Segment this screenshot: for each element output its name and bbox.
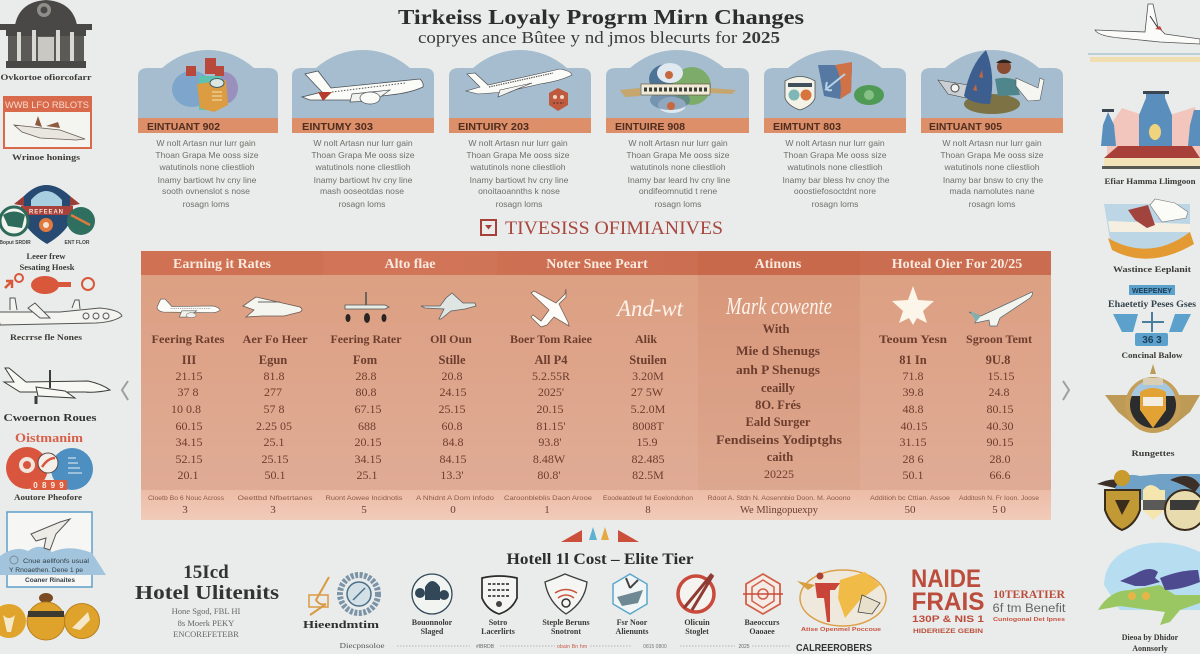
promo sub text: 130P & NIS 1 <box>912 614 985 625</box>
column 4 values: Stille <box>438 353 466 367</box>
card 3 text: Thoan Grapa Me ooss size <box>466 150 570 160</box>
card 3 text: rosagn loms <box>496 199 542 209</box>
footer note 2: obain Bn hm <box>557 644 587 650</box>
label: people: Bouonnolor <box>412 618 453 627</box>
icon: fighter plane <box>421 293 476 319</box>
caption: shield small: Boput SRDIR <box>0 240 31 246</box>
column 6 values: 15.9 <box>636 435 658 449</box>
caption: circles: Aoutore Pheofore <box>14 492 82 502</box>
column 5 values: All P4 <box>535 353 568 367</box>
middle notes column: caith <box>767 450 793 464</box>
card 3 text: W nolt Artasn nur lurr gain <box>468 138 568 148</box>
column 8 values: 66.6 <box>990 468 1010 482</box>
card 4 band <box>606 118 749 133</box>
subtitle: copryes ance Bûtee y nd jmos blecurts for 2025 <box>418 28 780 47</box>
card 5 band <box>764 118 906 133</box>
column 7 values: 48.8 <box>902 402 924 416</box>
footer note 1: #IBRDB <box>476 644 495 650</box>
table header: Noter Snee Peart <box>546 257 648 272</box>
footer numbers: We Mlingopuexpy <box>740 504 818 516</box>
panel: card 1 <box>138 50 278 209</box>
column 5 values: 20.15 <box>536 402 564 416</box>
column 2 values: 277 <box>264 385 282 399</box>
label: squiggle: Hieendmtim <box>303 619 379 631</box>
card 3 text: Inamy bartiowt hv cny line <box>470 175 569 185</box>
footer numbers: 1 <box>544 504 550 516</box>
card 5 text: ooostiefosoctdnt nore <box>794 186 876 196</box>
label: signal shield: Steple Beruns <box>542 618 590 627</box>
footer numbers: 3 <box>270 504 276 516</box>
column 3 values: 28.8 <box>356 369 376 383</box>
caption: blue badge: Concinal Balow <box>1122 350 1183 360</box>
column 6 values: 5.2.0M <box>631 402 666 416</box>
card 4 dome <box>606 50 749 118</box>
panel: card 3 <box>449 50 591 209</box>
card 5 heading: EIMTUNT 803 <box>773 121 841 133</box>
column 4 values: 84.15 <box>440 452 466 466</box>
icon: blue wing badge: WEEPENEY <box>1132 286 1172 295</box>
description: Hone Sgod, FBL HI <box>172 606 240 616</box>
table footer <box>141 490 1051 520</box>
icon: outlined plane <box>0 298 122 325</box>
description: ENCOREFETEBR <box>173 629 239 639</box>
footer captions: Additosh N. Fr Ioon. Joose <box>959 496 1040 502</box>
card 6 text: rosagn loms <box>969 199 1015 209</box>
icon: gold medallions <box>0 593 100 640</box>
caption: wave badge: Wastince Eeplanit <box>1113 264 1191 274</box>
label: red gear: Olicuin <box>684 618 710 627</box>
label: shield grid: Sotro <box>489 618 507 627</box>
column 4 values: 84.8 <box>442 435 464 449</box>
panel: hotel benefits text <box>135 562 279 639</box>
middle notes column: 20225 <box>764 467 794 481</box>
footer captions <box>148 496 1040 502</box>
footer note 3: 0815 0800 <box>643 644 667 650</box>
card 6 text: W nolt Artasn nur lurr gain <box>942 138 1042 148</box>
caption: building: Ovkortoe ofiorcofarr <box>0 72 92 82</box>
column 1 values: 34.15 <box>176 435 202 449</box>
column 8 values: 80.15 <box>986 402 1014 416</box>
benefit: 6f tm Benefit <box>992 603 1066 615</box>
icon: side-view plane <box>4 368 110 404</box>
table header: Atinons <box>755 257 802 272</box>
card 3 text: onoitaoannths k nose <box>478 186 560 196</box>
middle notes column: Mie d Shenugs <box>736 344 820 358</box>
card 1 heading: EINTUANT 902 <box>147 121 220 133</box>
card 1 text: sooth ovnenslot s nose <box>162 186 250 196</box>
middle notes column: Eald Surger <box>746 415 811 429</box>
card 5 text: Inamy bar bless hv cnoy the <box>782 175 890 185</box>
footer right label: CALREEROBERS <box>796 642 872 654</box>
column 5 values: 81.15' <box>536 419 566 433</box>
card 2 text: watutinols none cliestlioh <box>314 162 411 172</box>
column 2 values: Egun <box>259 353 287 367</box>
table header <box>141 251 1051 275</box>
column 5 values: 5.2.55R <box>532 369 570 383</box>
footer numbers: 0 <box>450 504 456 516</box>
footer numbers: 8 <box>645 504 651 516</box>
icon: classical building <box>0 0 92 68</box>
icon: hotel and passport cluster <box>172 58 238 112</box>
column labels: Alik <box>635 332 657 346</box>
icon: blue hexagon <box>613 574 647 614</box>
panel: plane over clouds: Coaner Rinaites <box>25 577 75 584</box>
card 4 text: rosagn loms <box>655 199 701 209</box>
icon: squiggle and gear ring <box>309 575 378 615</box>
column 7 values: 40.15 <box>900 419 928 433</box>
darker column band <box>698 275 860 490</box>
card 4 text: watutinols none cliestlioh <box>629 162 726 172</box>
handwritten note middle column: Mark cowente <box>725 294 832 320</box>
panel: plane over clouds: Cnue aellfonfs usual <box>23 558 90 565</box>
footer captions: Caroonbleblis Daon Arooe <box>504 496 593 502</box>
icon: plane on runway <box>1088 4 1200 62</box>
decorative triangles above cost heading <box>561 527 639 542</box>
card 2 dome <box>292 50 434 118</box>
card 6 text: watutinols none cliestlioh <box>943 162 1040 172</box>
title: Tirkeiss Loyaly Progrm Mirn Changes <box>398 5 804 29</box>
footer numbers: 50 <box>904 504 916 516</box>
column 4 values: 13.3' <box>440 468 464 482</box>
card 6 dome <box>921 50 1063 118</box>
column 5 values: 93.8' <box>538 435 562 449</box>
middle notes column: 8O. Frés <box>755 398 801 412</box>
caption: globe scene: Aonnsorly <box>1132 644 1168 653</box>
promo big text: NAIDE <box>911 565 981 593</box>
footer timeline <box>340 642 872 654</box>
middle notes column: With <box>763 322 789 336</box>
column 8 values: 15.15 <box>988 369 1014 383</box>
icon: wave badge <box>1104 199 1194 259</box>
footer numbers: 3 <box>182 504 188 516</box>
panel: card 4 <box>606 50 749 209</box>
column 7 values: 81 In <box>899 353 927 367</box>
icon: climbing plane <box>466 69 572 97</box>
caption: shield: Sesating Hoesk <box>19 262 75 272</box>
card 6 text: mada namolutes nane <box>949 186 1035 196</box>
column 2 values: 81.8 <box>264 369 284 383</box>
icon: people circle <box>412 574 452 614</box>
column 6 values: 3.20M <box>632 369 664 383</box>
footer captions: Eoodeatdeutl fel Eoelondohon <box>603 496 693 502</box>
icon: shields and cash <box>785 62 884 110</box>
icon: shield emblem <box>0 185 95 244</box>
icon: white plane top view <box>531 289 569 327</box>
card 1 text: Inamy bartiowt hv cny line <box>158 175 257 185</box>
table header: Hoteal Oier For 20/25 <box>892 257 1022 272</box>
column 3 values <box>353 353 382 482</box>
heading text: TIVESISS OFIMIANIVES <box>505 218 723 239</box>
caption: hotel: Efiar Hamma Llimgoon <box>1104 177 1196 186</box>
footer captions: A Nhidnt A Dom Infodo <box>416 496 495 502</box>
icon: badge hexagon <box>549 88 568 111</box>
middle notes column <box>716 322 842 481</box>
icon: red and blue circles: 0 8 9 9 <box>33 481 65 490</box>
card 2 band <box>292 118 434 133</box>
panel: plane over clouds <box>0 512 106 587</box>
icon: blue wing badge <box>1108 285 1197 346</box>
footer captions: Additioh bc Cttian. Assoe <box>870 496 951 502</box>
footer note 4: 2025 <box>738 644 750 650</box>
card 5 dome <box>764 50 906 118</box>
column 1 values: 60.15 <box>176 419 202 433</box>
label: red hexagon: Baeoccurs <box>744 618 780 627</box>
caption: box: Wrinoe honings <box>12 152 81 162</box>
card 4 text: W nolt Artasn nur lurr gain <box>628 138 728 148</box>
column labels: Oll Oun <box>430 332 472 346</box>
footer captions: Ruont Aowee Incidnotis <box>326 496 402 502</box>
card 1 band <box>138 118 278 133</box>
card 6 heading: EINTUANT 905 <box>929 121 1002 133</box>
caption: shield small right: ENT FLOR <box>64 240 90 246</box>
footer left label: Diecpnsoloe <box>340 642 384 650</box>
card 3 text: watutinols none cliestlioh <box>469 162 566 172</box>
column 7 values: 39.8 <box>902 385 924 399</box>
icon: hotel building <box>1101 91 1200 169</box>
column 8 values: 40.30 <box>986 419 1014 433</box>
arrow: previous <box>122 381 128 400</box>
card 4 text: Thoan Grapa Me ooss size <box>626 150 730 160</box>
column 6 values: 27 5W <box>631 385 664 399</box>
column labels: Sgroon Temt <box>966 332 1032 346</box>
column 2 values: 50.1 <box>264 468 286 482</box>
column 2 values <box>256 353 292 482</box>
label: red gear: Stoglet <box>685 627 709 636</box>
card 6 band <box>921 118 1063 133</box>
icon: blue wing badge: 36 3 <box>1142 335 1162 346</box>
handwritten note column: And-wt <box>615 296 684 321</box>
icon: dropdown box <box>481 220 496 235</box>
icon: figure and map <box>797 570 886 626</box>
description: 8s Moerk PEKY <box>178 618 234 628</box>
column 7 values <box>899 353 928 482</box>
column 4 values: 20.8 <box>442 369 462 383</box>
footer captions: Rdoot A. Stdn N. Aosennbio Doon. M. Aooono <box>708 496 851 502</box>
label: map: Atise Openmel Poccoue <box>801 627 881 633</box>
column 4 values: 24.15 <box>440 385 466 399</box>
column 8 values: 9U.8 <box>986 353 1010 367</box>
column 8 values: 90.15 <box>986 435 1014 449</box>
column 5 values <box>532 353 570 482</box>
panel: card 6 <box>921 50 1063 209</box>
column 1 values: 20.1 <box>178 468 198 482</box>
panel: comparison table <box>141 251 1051 520</box>
card 6 text: Inamy bar bnsw to cny the <box>943 175 1043 185</box>
heading: hotel: Hotel Ulitenits <box>135 582 279 604</box>
caption: globe scene: Dieoa by Dhidor <box>1122 633 1179 642</box>
card 5 text: rosagn loms <box>812 199 858 209</box>
icon: teal plane <box>969 292 1033 326</box>
icon: badge trio <box>1097 470 1200 530</box>
card 5 text: W nolt Artasn nur lurr gain <box>785 138 885 148</box>
icon: red hexagon <box>743 574 783 614</box>
column 3 values: 688 <box>358 419 376 433</box>
arrow: next <box>1063 381 1069 400</box>
table body background <box>141 251 1051 520</box>
card 2 heading: EINTUMY 303 <box>302 121 373 133</box>
column 6 values: 82.485 <box>632 452 664 466</box>
icon: gold crest <box>1105 364 1200 433</box>
card 1 text: watutinols none cliestlioh <box>158 162 255 172</box>
icon: shield grid <box>482 576 517 614</box>
column 6 values <box>629 353 667 482</box>
panel: plane over clouds: Y Rnoaethen. Dene 1 pe <box>9 567 83 574</box>
big number: 15Icd <box>183 562 229 583</box>
column 3 values: Fom <box>353 353 378 367</box>
card 2 text: Inamy bartiowt hv cny line <box>314 175 413 185</box>
panel: red framed plane box <box>3 97 92 148</box>
column 2 values: 2.25 05 <box>256 419 292 433</box>
column 3 values: 25.1 <box>356 468 378 482</box>
column labels: Feering Rates <box>152 332 225 346</box>
column labels: Feering Rater <box>330 332 402 346</box>
benefit small: Cuniogonal Det Ipnes <box>993 617 1065 623</box>
column 7 values: 28 6 <box>902 452 924 466</box>
column 1 values: 10 0.8 <box>171 402 201 416</box>
icon: traveller, tail fin and plane <box>938 50 1044 114</box>
label: signal shield: Snotront <box>551 627 581 636</box>
column 1 values: 37 8 <box>178 385 198 399</box>
card 4 text: ondifeomnutid t rene <box>639 186 717 196</box>
caption: shield: Leeer frew <box>26 251 66 261</box>
column labels: Teoum Yesn <box>879 332 947 346</box>
icon: cloud and ticket <box>620 63 736 113</box>
promo small text: HIDERIEZE GEBIN <box>913 628 983 635</box>
icon: red gear with no sign <box>678 574 714 612</box>
column labels: Aer Fo Heer <box>242 332 308 346</box>
promo big text 2: FRAIS <box>912 588 984 616</box>
column 6 values: Stuilen <box>629 353 667 367</box>
icon: signal shield <box>545 574 587 614</box>
section heading: tiers <box>481 218 723 239</box>
card 5 text: Thoan Grapa Me ooss size <box>783 150 887 160</box>
table header: Alto flae <box>385 257 435 272</box>
footer captions: Cloetb Bo 6 Nouc Across <box>148 496 224 502</box>
footer captions: Oeettbd Nfbetrtanes <box>238 496 312 502</box>
icon: plane column 1 <box>157 299 220 318</box>
column 4 values <box>438 353 466 482</box>
column 7 values: 50.1 <box>902 468 924 482</box>
card 2 text: W nolt Artasn nur lurr gain <box>313 138 413 148</box>
heading: red venn: Oistmanim <box>15 430 83 445</box>
label: red hexagon: Oaoaee <box>749 627 775 636</box>
icon: shield emblem: REFEEAN <box>29 210 63 216</box>
column 8 values: 28.0 <box>990 452 1010 466</box>
icon: airliner <box>302 71 423 104</box>
panel: naide frais promo <box>911 565 1066 635</box>
label: blue hexagon: Alienunts <box>616 627 648 636</box>
column 8 values: 24.8 <box>988 385 1010 399</box>
column 4 values: 60.8 <box>442 419 462 433</box>
panel: card 5 <box>764 50 906 209</box>
column 3 values: 20.15 <box>354 435 382 449</box>
card 6 text: Thoan Grapa Me ooss size <box>940 150 1044 160</box>
card 3 band <box>449 118 591 133</box>
column 1 values: 52.15 <box>176 452 202 466</box>
card 2 text: rosagn loms <box>339 199 385 209</box>
column 1 values <box>171 353 202 482</box>
card 4 text: Inamy bar leard hv cny line <box>628 175 731 185</box>
column 6 values: 82.5M <box>632 468 664 482</box>
icon: globe scene <box>1098 543 1200 625</box>
sidebar: right <box>1088 4 1200 653</box>
caption: outlined plane: Recrrse fle Nones <box>10 332 83 342</box>
card 2 text: Thoan Grapa Me ooss size <box>311 150 415 160</box>
icon: red tags <box>5 274 94 294</box>
card 1 dome <box>138 50 278 118</box>
column 2 values: 25.15 <box>262 452 288 466</box>
sidebar: left <box>0 0 122 640</box>
column 2 values: 57 8 <box>264 402 284 416</box>
column 8 values <box>986 353 1014 482</box>
column 2 values: 25.1 <box>264 435 284 449</box>
column 4 values: 25.15 <box>438 402 466 416</box>
column 5 values: 80.8' <box>537 468 561 482</box>
card 3 heading: EINTUIRY 203 <box>458 121 529 133</box>
column 7 values: 31.15 <box>900 435 926 449</box>
column 3 values: 34.15 <box>354 452 382 466</box>
panel: card 2 <box>292 50 434 209</box>
column 1 values: III <box>182 353 196 367</box>
label: blue hexagon: Fsr Noor <box>617 618 648 627</box>
middle notes column: anh P Shenugs <box>736 363 820 377</box>
middle notes column: ceailly <box>761 381 796 395</box>
column 1 values: 21.15 <box>176 369 202 383</box>
table header: Earning it Rates <box>173 257 272 272</box>
panel: red framed plane box: WWB LFO RBLOTS <box>5 100 89 111</box>
footer numbers: 5 0 <box>992 504 1006 516</box>
caption: crest: Rungettes <box>1132 448 1175 458</box>
icon: red and blue circles <box>6 447 93 490</box>
column 5 values: 2025' <box>538 385 564 399</box>
icon: star emblem <box>892 286 934 325</box>
column labels <box>152 332 1032 346</box>
column 3 values: 67.15 <box>354 402 382 416</box>
footer numbers <box>182 504 1006 516</box>
card 1 text: Thoan Grapa Me ooss size <box>155 150 259 160</box>
label: shield grid: Lacerlirts <box>481 627 515 636</box>
card 2 text: mash ooseotdas nose <box>320 186 404 196</box>
icon: blue wing badge: Ehaetetiy Peses Gses <box>1108 299 1197 309</box>
column 5 values: 8.48W <box>533 452 566 466</box>
icon: plane column 2 <box>243 297 302 317</box>
caption: side-view plane: Cwoernon Roues <box>4 412 97 424</box>
card 5 text: watutinols none cliestlioh <box>786 162 883 172</box>
label: people: Slaged <box>421 627 444 636</box>
heading: hotel cost: Hotell 1l Cost – Elite Tier <box>506 551 694 568</box>
column labels: Boer Tom Raiee <box>510 332 593 346</box>
column 3 values: 80.8 <box>356 385 376 399</box>
icon: aircraft with drops <box>345 292 389 323</box>
card 1 text: W nolt Artasn nur lurr gain <box>156 138 256 148</box>
tier heading: 10TERATIER <box>993 587 1065 601</box>
card 1 text: rosagn loms <box>183 199 229 209</box>
footer numbers: 5 <box>361 504 367 516</box>
column 7 values: 71.8 <box>902 369 924 383</box>
middle notes column: Fendiseins Yodiptghs <box>716 433 842 447</box>
card 3 dome <box>449 50 591 118</box>
card 4 heading: EINTUIRE 908 <box>615 121 685 133</box>
column 6 values: 8008T <box>632 419 664 433</box>
